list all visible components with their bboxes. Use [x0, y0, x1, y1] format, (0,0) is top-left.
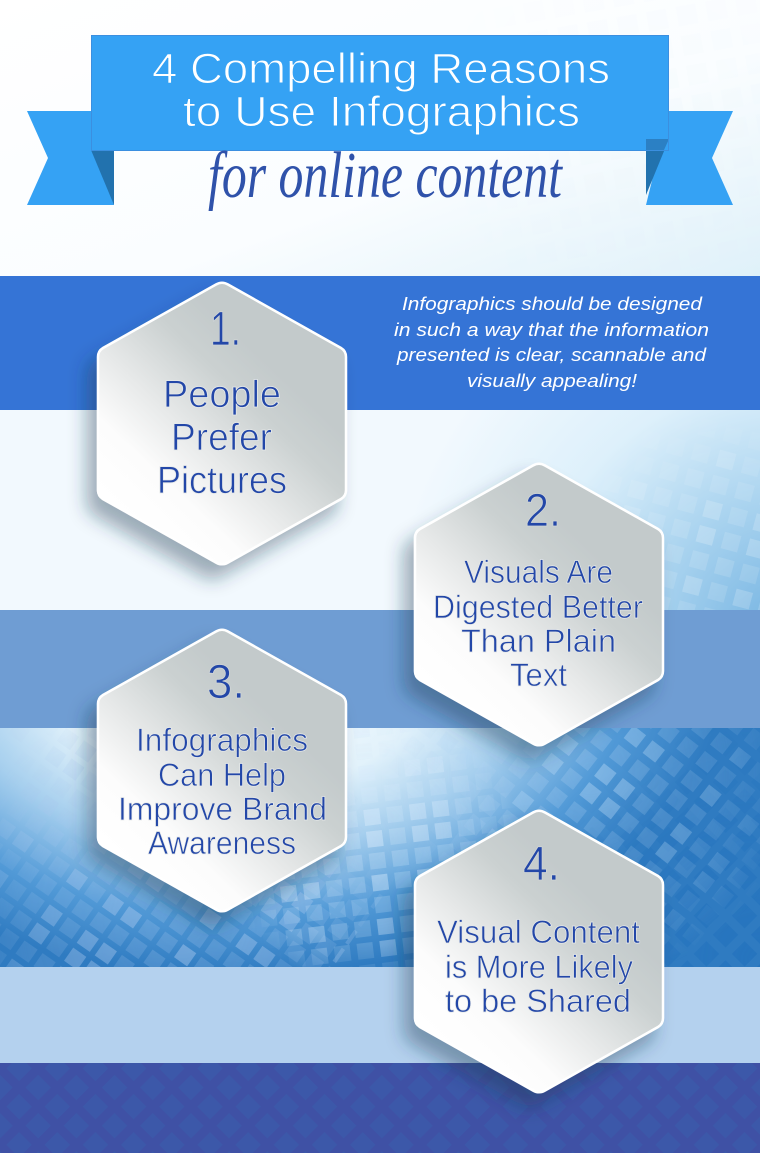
heading: Visual Content is More Likely to be Shared: is More Likely — [445, 949, 633, 985]
background: pale upper area — [224, 65, 760, 276]
heading: People Prefer Pictures: Prefer — [171, 417, 272, 459]
heading: Infographics Can Help Improve Brand Awareness: Awareness — [148, 825, 296, 861]
panel: reason 1 — [98, 283, 346, 564]
heading: Infographics Can Help Improve Brand Awareness: Infographics — [136, 722, 308, 758]
band: dark blue top — [0, 276, 760, 410]
intro text: visually appealing! — [467, 371, 637, 391]
panel: reason 2 — [415, 464, 663, 745]
panel: reason 3 — [98, 630, 346, 911]
number 1: 1. — [210, 303, 241, 356]
band: medium blue — [0, 610, 760, 728]
intro text: in such a way that the information — [394, 320, 709, 340]
number 2: 2. — [525, 484, 561, 536]
intro text: Infographics should be designed — [402, 294, 703, 314]
heading: Visuals Are Digested Better Than Plain Text — [433, 554, 643, 693]
heading: Infographics Can Help Improve Brand Awareness: Improve Brand — [118, 791, 327, 827]
heading: Visuals Are Digested Better Than Plain Text: Than Plain — [461, 623, 616, 659]
background: pale middle area with squares — [0, 410, 760, 610]
heading: Visuals Are Digested Better Than Plain Text: Text — [510, 657, 567, 693]
heading: Visuals Are Digested Better Than Plain Text: Visuals Are — [464, 554, 613, 590]
band: pale blue — [0, 967, 760, 1063]
heading: Infographics Can Help Improve Brand Awareness: Can Help — [158, 757, 286, 793]
heading: Visual Content is More Likely to be Shared: Visual Content — [437, 914, 640, 950]
title: 4 Compelling Reasons — [152, 45, 610, 93]
heading: Infographics Can Help Improve Brand Awareness — [118, 722, 327, 861]
band: navy footer — [0, 1063, 760, 1153]
heading: Visuals Are Digested Better Than Plain Text: Digested Better — [433, 589, 643, 625]
heading: Visual Content is More Likely to be Shared: to be Shared — [445, 983, 631, 1019]
intro text — [394, 294, 709, 391]
background: blue swirl with squares — [0, 728, 760, 967]
heading: Visual Content is More Likely to be Shared — [437, 914, 640, 1019]
title — [152, 45, 610, 136]
number 4: 4. — [523, 838, 560, 891]
heading: People Prefer Pictures: People — [163, 374, 281, 416]
heading: People Prefer Pictures: Pictures — [157, 460, 287, 502]
heading: People Prefer Pictures — [157, 374, 287, 502]
number 3: 3. — [207, 656, 245, 709]
subtitle script: for online content — [208, 139, 563, 212]
title: to Use Infographics — [183, 88, 580, 136]
panel: reason 4 — [415, 811, 663, 1092]
ribbon banner — [27, 35, 733, 205]
intro text: presented is clear, scannable and — [396, 345, 707, 365]
